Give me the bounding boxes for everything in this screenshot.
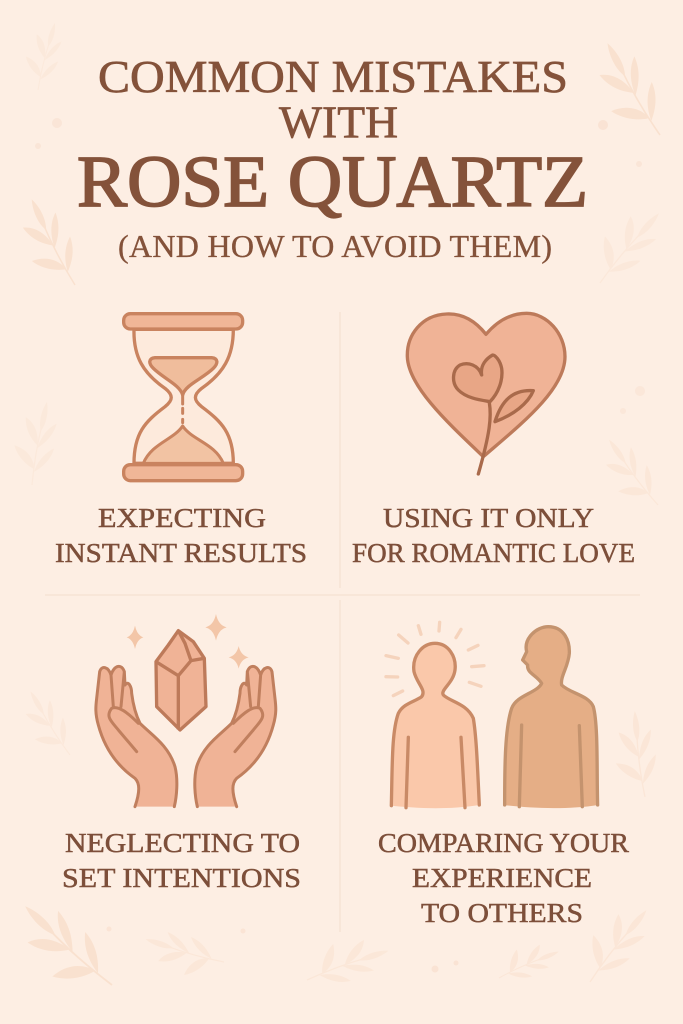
icon: heart with flower <box>407 313 565 474</box>
label: neglecting to set intentions: NEGLECTING TO <box>65 828 300 858</box>
label: comparing your experience to others: TO OTHERS <box>421 898 583 928</box>
label: neglecting to set intentions <box>62 828 301 893</box>
panel: expecting instant results <box>55 314 307 568</box>
icon: glow rays <box>386 622 484 696</box>
icon: crystal <box>156 631 206 730</box>
label: expecting instant results: INSTANT RESULTS <box>55 538 307 568</box>
icon: right hand <box>195 666 276 807</box>
icon: glowing person <box>390 643 480 808</box>
icon: other person <box>503 627 598 808</box>
title line 2: WITH <box>279 98 398 148</box>
title block <box>77 52 588 264</box>
icon: left hand <box>96 666 177 807</box>
label: using it only for romantic love: USING IT ONLY <box>383 503 594 533</box>
label: comparing your experience to others: EXPERIENCE <box>412 863 592 893</box>
label: comparing your experience to others: COMPARING YOUR <box>378 828 629 858</box>
icon: sparkles <box>127 614 249 669</box>
subtitle: (AND HOW TO AVOID THEM) <box>118 228 552 264</box>
label: using it only for romantic love: FOR ROMANTIC LOVE <box>352 538 635 568</box>
label: expecting instant results: EXPECTING <box>98 503 266 533</box>
title line 3: rose quartz: ROSE QUARTZ <box>77 141 588 222</box>
label: using it only for romantic love <box>352 503 635 568</box>
panel: neglecting to set intentions <box>62 614 301 893</box>
grid dividers <box>45 312 640 932</box>
icon: hourglass <box>124 314 243 481</box>
label: expecting instant results <box>55 503 307 568</box>
icon: hands holding crystal <box>96 614 276 807</box>
label: neglecting to set intentions: SET INTENTIONS <box>62 863 301 893</box>
title line 1: COMMON MISTAKES <box>98 52 568 102</box>
icon: two people <box>386 622 598 808</box>
label: comparing your experience to others <box>378 828 629 928</box>
panel: using it only for romantic love <box>352 313 635 568</box>
panel: comparing your experience to others <box>378 622 629 928</box>
